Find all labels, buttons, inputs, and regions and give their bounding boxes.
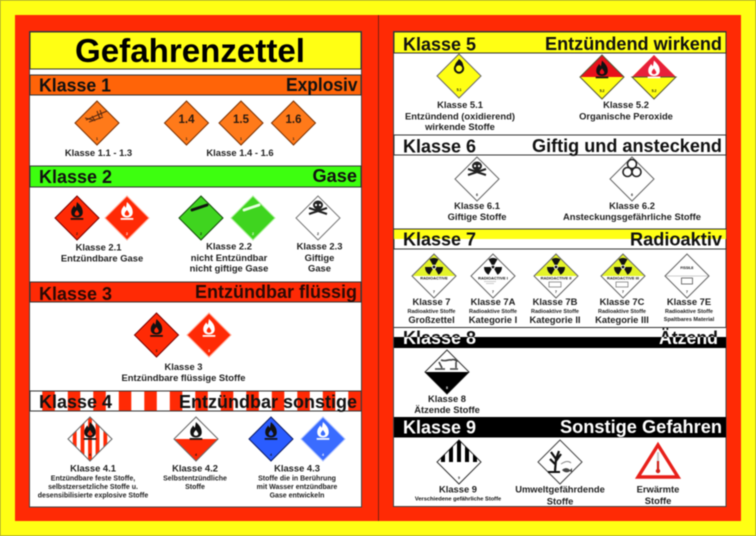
label: Klasse 4.3: Gase entwickeln bbox=[270, 492, 324, 499]
icon: striped diamond class 9 bbox=[437, 440, 481, 484]
label: Klasse 7C: Klasse 7C bbox=[600, 296, 645, 307]
icon: radioactive diamond 7B bbox=[534, 254, 578, 298]
label: Klasse 4.3 bbox=[257, 462, 337, 499]
label: Erwärmte Stoffe: Stoffe bbox=[645, 495, 671, 506]
icon: white toxic gas diamond bbox=[296, 196, 340, 240]
icon: environmental hazard diamond bbox=[538, 440, 582, 484]
heading: Klasse 6 Giftig und ansteckend: Giftig und ansteckend bbox=[532, 136, 722, 156]
label: Klasse 6.1: Klasse 6.1 bbox=[454, 200, 500, 211]
label: Klasse 6.2 bbox=[563, 200, 701, 222]
label: Klasse 7B bbox=[529, 296, 581, 325]
section: Klasse 1 bbox=[30, 75, 361, 158]
label: Klasse 7: Großzettel bbox=[408, 314, 455, 325]
label: Klasse 4.3: mit Wasser entzündbare bbox=[257, 484, 337, 491]
icon: green gas diamond white cylinder bbox=[231, 196, 275, 240]
heading: Klasse 7 Radioaktiv: Klasse 7 bbox=[403, 230, 476, 250]
heading: Klasse 2 Gase: Klasse 2 bbox=[39, 167, 112, 187]
section: Klasse 2 bbox=[30, 166, 361, 274]
icon: radioactive diamond 7: RADIOACTIVE bbox=[420, 276, 448, 280]
icon: diamond 1.5: 1.5 bbox=[233, 114, 250, 126]
label: Klasse 4.1 bbox=[38, 462, 148, 499]
label: Klasse 7A: Radioaktive Stoffe bbox=[469, 309, 517, 315]
icon: half red diamond 4.2: 4 bbox=[195, 453, 197, 457]
label: Erwärmte Stoffe bbox=[637, 484, 679, 506]
icon: red flammable diamond black flame: 2 bbox=[76, 232, 78, 236]
label: Klasse 5.1: Klasse 5.1 bbox=[437, 99, 483, 110]
heading: Klasse 9 Sonstige Gefahren bbox=[394, 417, 726, 438]
label: Klasse 5.2 bbox=[579, 99, 673, 122]
title band: Gefahrenzettel bbox=[75, 32, 305, 69]
label: Klasse 2.2 bbox=[190, 240, 268, 274]
icon: red flammable liquid diamond white flame bbox=[187, 313, 231, 357]
heading: Klasse 1 Explosiv bbox=[30, 75, 361, 96]
label: Klasse 4.2: Stoffe bbox=[185, 484, 205, 491]
icon: radioactive diamond 7: 7 bbox=[433, 290, 435, 294]
label: Klasse 7E bbox=[664, 296, 715, 323]
label: Klasse 4.1: Entzündbare feste Stoffe, bbox=[51, 476, 135, 483]
heading: Klasse 8 Ätzend: Ätzend bbox=[659, 328, 718, 348]
label: Klasse 2.2: Klasse 2.2 bbox=[206, 240, 252, 252]
icon: radioactive diamond 7A bbox=[471, 254, 515, 298]
heading: Klasse 6 Giftig und ansteckend: Klasse 6 bbox=[403, 136, 476, 156]
label: Klasse 4.3: Stoffe die in Berührung bbox=[258, 476, 336, 483]
label: Erwärmte Stoffe: Erwärmte bbox=[637, 484, 679, 495]
label: Klasse 4.1: selbstzersetzliche Stoffe u. bbox=[48, 484, 138, 491]
label: Klasse 2.1 bbox=[61, 242, 143, 264]
icon: fissile diamond 7E bbox=[665, 254, 709, 298]
label: Klasse 4.2 bbox=[163, 462, 227, 491]
icon: red flammable liquid diamond black flame: 3 bbox=[156, 349, 158, 353]
label: Klasse 2.3 bbox=[297, 240, 342, 274]
icon: diamond 1.5: 1 bbox=[240, 137, 242, 141]
icon: radioactive diamond 7C bbox=[601, 254, 645, 298]
icon: blue diamond white flame: 4 bbox=[322, 453, 324, 457]
label: Klasse 7: Radioaktive Stoffe bbox=[408, 309, 455, 315]
icon: yellow oxidizer diamond bbox=[437, 54, 481, 98]
label: Klasse 2.2: nicht giftige Gase bbox=[190, 262, 268, 274]
label: Klasse 3: Entzündbare flüssige Stoffe bbox=[122, 372, 245, 383]
icon: red flammable diamond white flame bbox=[105, 196, 149, 240]
label: Klasse 5.1 bbox=[405, 99, 515, 132]
label: Klasse 7C: Kategorie III bbox=[595, 314, 649, 325]
heading: Klasse 5 Entzündend wirkend: Klasse 5 bbox=[403, 34, 476, 54]
icon: blue diamond white flame bbox=[301, 417, 345, 461]
heading: Klasse 9 Sonstige Gefahren: Sonstige Gefahren bbox=[560, 417, 722, 437]
heading: Klasse 3 Entzündbar flüssig: Entzündbar flüssig bbox=[195, 282, 357, 302]
icon: diamond 1.4: 1 bbox=[186, 137, 188, 141]
panel: left page bbox=[15, 15, 380, 521]
label: Klasse 7E: Radioaktive Stoffe bbox=[665, 309, 713, 315]
heading: Klasse 4 Entzündbar sonstige: Klasse 4 bbox=[39, 392, 112, 412]
icon: diamond 1.6 bbox=[272, 101, 316, 145]
section: Klasse 8 bbox=[394, 327, 726, 415]
label: Klasse 6.2: Klasse 6.2 bbox=[609, 200, 655, 211]
icon: toxic diamond bbox=[455, 157, 499, 201]
label: Klasse 3: Klasse 3 bbox=[164, 361, 203, 372]
label: Umweltgefährdende Stoffe: Umweltgefährdende bbox=[515, 484, 605, 495]
icon: radioactive diamond 7B: RADIOACTIVE II bbox=[541, 276, 571, 280]
heading: Klasse 3 Entzündbar flüssig: Klasse 3 bbox=[39, 284, 112, 304]
icon: fissile diamond 7E: 7 bbox=[686, 290, 688, 294]
label: Klasse 4.2: Klasse 4.2 bbox=[172, 462, 218, 474]
label: Klasse 7A: Klasse 7A bbox=[471, 296, 516, 307]
heading: Klasse 4 Entzündbar sonstige bbox=[30, 391, 361, 412]
section: Klasse 5 bbox=[394, 32, 726, 132]
section: Klasse 3 bbox=[30, 282, 361, 383]
icon: blue diamond black flame bbox=[249, 417, 293, 461]
icon: diamond 1.4 bbox=[164, 101, 208, 145]
heading: Klasse 7 Radioaktiv: Radioaktiv bbox=[630, 230, 722, 250]
icon: red yellow peroxide diamond white flame: 5.2 bbox=[652, 89, 656, 93]
label: Umweltgefährdende Stoffe bbox=[515, 484, 605, 507]
label: Klasse 7A bbox=[469, 296, 517, 325]
icon: striped diamond 4.1 bbox=[68, 417, 112, 461]
label: Klasse 7E: Spaltbares Material bbox=[664, 317, 715, 323]
heading: Klasse 7 Radioaktiv bbox=[394, 229, 726, 250]
icon: red flammable diamond black flame bbox=[55, 196, 99, 240]
label: Klasse 3 bbox=[122, 361, 245, 383]
label: Klasse 6.2: Ansteckungsgefährliche Stoffe bbox=[563, 211, 701, 222]
label: Klasse 7: Klasse 7 bbox=[412, 296, 451, 307]
heading: Klasse 5 Entzündend wirkend bbox=[394, 32, 726, 54]
label: Klasse 4.2: Selbstentzündliche bbox=[163, 476, 227, 483]
icon: biohazard diamond bbox=[610, 157, 654, 201]
label: Klasse 9 bbox=[415, 484, 501, 503]
heading: Klasse 1 Explosiv: Klasse 1 bbox=[39, 76, 111, 96]
label: Klasse 5.2: Klasse 5.2 bbox=[603, 99, 649, 110]
icon: corrosive diamond: 8 bbox=[446, 386, 448, 390]
label: Klasse 7C bbox=[595, 296, 649, 325]
icon: radioactive diamond 7A: 7 bbox=[492, 290, 494, 294]
icon: half red diamond 4.2 bbox=[174, 417, 218, 461]
heading: Klasse 8 Ätzend: Klasse 8 bbox=[403, 328, 476, 348]
heading: Klasse 2 Gase: Gase bbox=[312, 166, 357, 186]
icon: red flammable liquid diamond black flame bbox=[134, 313, 178, 357]
icon: diamond 1.4: 1.4 bbox=[178, 114, 195, 126]
label: Klasse 6.1: Giftige Stoffe bbox=[448, 211, 506, 222]
icon: radioactive diamond 7B: 7 bbox=[555, 290, 557, 294]
label: Umweltgefährdende Stoffe: Stoffe bbox=[547, 496, 573, 507]
icon: striped diamond class 9: 9 bbox=[458, 476, 460, 480]
label: Klasse 5.1: wirkende Stoffe bbox=[424, 121, 495, 132]
heading: Klasse 8 Ätzend: Ätzend bbox=[659, 328, 718, 348]
icon: yellow oxidizer diamond: 5.1 bbox=[457, 88, 461, 92]
icon: explosive diamond 1.1-1.3: 1 bbox=[96, 137, 98, 141]
heading: Klasse 8 Ätzend: Klasse 8 bbox=[403, 328, 476, 348]
label: Klasse 9: Verschiedene gefährliche Stoffe bbox=[415, 497, 501, 503]
section: Klasse 7 bbox=[394, 229, 726, 325]
icon: radioactive diamond 7C: RADIOACTIVE III bbox=[607, 276, 639, 280]
label: Klasse 7A: Kategorie I bbox=[469, 314, 517, 325]
title band bbox=[30, 32, 361, 69]
label: Klasse 1.4 - 1.6: Klasse 1.4 - 1.6 bbox=[206, 147, 274, 158]
icon: warning triangle hot substance bbox=[638, 445, 678, 477]
heading: Klasse 5 Entzündend wirkend: Entzündend wirkend bbox=[545, 34, 722, 54]
section: Klasse 9 bbox=[394, 417, 726, 507]
label: Klasse 9: Klasse 9 bbox=[439, 484, 477, 495]
label: Klasse 5.2: Organische Peroxide bbox=[579, 110, 673, 122]
label: Klasse 4.1: desensibilisierte explosive Stoffe bbox=[38, 492, 148, 499]
panel: right page bbox=[380, 15, 741, 521]
icon: green gas diamond white cylinder: 2 bbox=[252, 232, 254, 236]
label: Klasse 4.1: Klasse 4.1 bbox=[70, 462, 116, 474]
label: Klasse 7E: Klasse 7E bbox=[667, 296, 711, 307]
icon: radioactive diamond 7A: RADIOACTIVE I bbox=[478, 276, 508, 280]
label: Klasse 5.1: Entzündend (oxidierend) bbox=[405, 110, 515, 122]
icon: red flammable diamond white flame: 2 bbox=[126, 232, 128, 236]
label: Klasse 7 bbox=[408, 296, 455, 325]
label: Klasse 8: Klasse 8 bbox=[428, 393, 466, 404]
icon: striped diamond 4.1: 4 bbox=[89, 453, 91, 457]
icon: red yellow peroxide diamond black flame: 5.2 bbox=[600, 89, 604, 93]
label: Klasse 7B: Klasse 7B bbox=[533, 296, 578, 307]
icon: toxic diamond: 6 bbox=[476, 193, 478, 197]
icon: corrosive diamond bbox=[425, 350, 469, 394]
section: Klasse 6 bbox=[394, 135, 726, 222]
icon: radioactive diamond 7 bbox=[412, 254, 456, 298]
label: Klasse 1.1 - 1.3: Klasse 1.1 - 1.3 bbox=[65, 147, 132, 158]
heading: Klasse 3 Entzündbar flüssig bbox=[30, 282, 361, 304]
label: Klasse 7B: Kategorie II bbox=[529, 314, 581, 325]
label: Klasse 2.3: Klasse 2.3 bbox=[297, 240, 342, 252]
label: Klasse 2.3: Giftige bbox=[305, 252, 334, 263]
label: Klasse 7B: Radioaktive Stoffe bbox=[531, 309, 579, 315]
section: Klasse 4 bbox=[30, 391, 361, 499]
icon: red yellow peroxide diamond black flame bbox=[580, 55, 624, 99]
icon: red flammable liquid diamond white flame: 3 bbox=[208, 349, 210, 353]
icon: diamond 1.6: 1 bbox=[293, 137, 295, 141]
heading: Klasse 2 Gase bbox=[30, 166, 361, 187]
label: Klasse 2.1: Entzündbare Gase bbox=[61, 252, 143, 264]
label: Klasse 2.2: nicht Entzündbar bbox=[191, 252, 268, 263]
heading: Klasse 8 Ätzend bbox=[394, 327, 726, 348]
heading: Klasse 6 Giftig und ansteckend bbox=[394, 135, 726, 156]
icon: fissile diamond 7E: FISSILE bbox=[680, 266, 694, 270]
label: Klasse 2.1: Klasse 2.1 bbox=[76, 242, 121, 252]
heading: Klasse 4 Entzündbar sonstige: Entzündbar sonstige bbox=[179, 392, 357, 412]
label: Klasse 8 bbox=[414, 393, 480, 415]
icon: diamond 1.6: 1.6 bbox=[286, 114, 302, 126]
heading: Klasse 9 Sonstige Gefahren: Klasse 9 bbox=[403, 418, 476, 438]
label: Klasse 7C: Radioaktive Stoffe bbox=[598, 309, 646, 315]
icon: radioactive diamond 7C: 7 bbox=[622, 290, 624, 294]
icon: white toxic gas diamond: 2 bbox=[317, 232, 319, 236]
icon: red yellow peroxide diamond white flame bbox=[632, 55, 676, 99]
label: Klasse 8: Ätzende Stoffe bbox=[414, 404, 480, 415]
icon: green gas diamond black cylinder: 2 bbox=[200, 232, 202, 236]
icon: diamond 1.5 bbox=[219, 101, 263, 145]
icon: biohazard diamond: 6 bbox=[631, 193, 633, 197]
icon: explosive diamond 1.1-1.3 bbox=[75, 101, 119, 145]
icon: blue diamond black flame: 4 bbox=[270, 453, 272, 457]
heading: Klasse 1 Explosiv: Explosiv bbox=[286, 75, 358, 95]
label: Klasse 6.1 bbox=[448, 200, 506, 222]
label: Klasse 4.3: Klasse 4.3 bbox=[274, 462, 320, 474]
icon: green gas diamond black cylinder bbox=[179, 196, 223, 240]
label: Klasse 2.3: Gase bbox=[308, 262, 331, 274]
